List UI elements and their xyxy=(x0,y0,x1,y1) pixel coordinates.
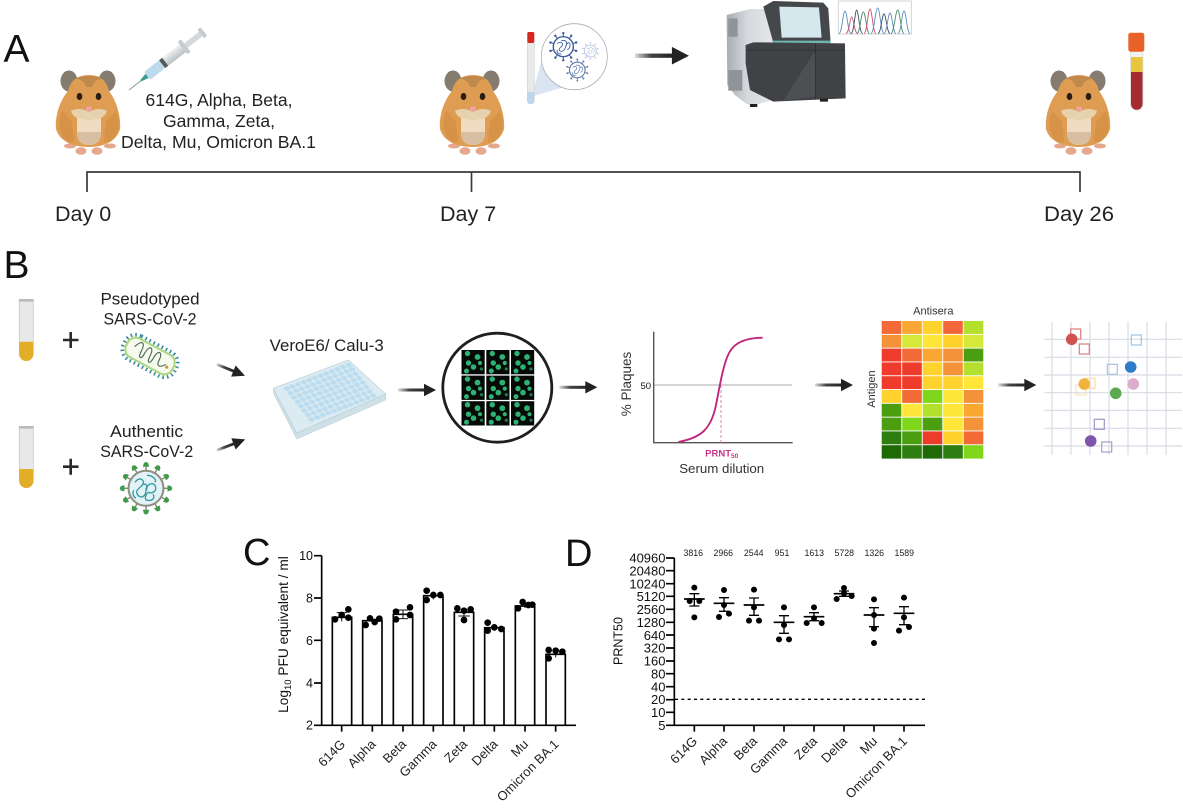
arrow: pseudotyped to plate xyxy=(214,359,247,381)
x-axis labels: Delta xyxy=(818,733,851,766)
panel: D PRNT50 titres xyxy=(565,533,925,801)
label: pseudotyped: SARS-CoV-2 xyxy=(104,310,196,328)
icon: microscopy well xyxy=(443,333,552,442)
icon: syringe xyxy=(124,25,209,96)
label: authentic: Authentic xyxy=(110,423,183,441)
icon: blood tube xyxy=(1128,33,1144,110)
y-axis title: PRNT50 xyxy=(612,617,626,665)
x-axis labels: Mu xyxy=(508,737,531,760)
x-axis labels: Gamma xyxy=(396,736,440,780)
panel: C virus titres xyxy=(243,532,576,804)
geometric mean titres: 1326 xyxy=(865,548,884,558)
x-axis labels: Delta xyxy=(469,736,501,769)
text: variants inoculated: 614G, Alpha, Beta, xyxy=(146,90,292,110)
arrow: authentic to plate xyxy=(215,434,247,456)
x-axis labels: 614G xyxy=(667,734,700,767)
x-axis labels: Alpha xyxy=(345,736,379,771)
y-axis title: PFU equivalent / ml xyxy=(276,556,291,679)
geometric mean titres: 1613 xyxy=(805,548,824,558)
y-axis labels: 5120 xyxy=(637,589,666,604)
geometric mean titres: 2544 xyxy=(744,548,764,558)
y-axis labels: 160 xyxy=(644,654,666,669)
bar chart xyxy=(314,556,576,732)
timeline axis xyxy=(87,172,1080,192)
panel: A timeline xyxy=(4,1,1144,226)
y-axis labels xyxy=(629,551,666,733)
geometric mean titres xyxy=(684,548,914,558)
x-axis labels: Beta xyxy=(380,736,410,766)
x-axis labels: Alpha xyxy=(696,733,731,768)
icon: plus 1 xyxy=(63,332,78,348)
chart: neutralisation curve xyxy=(619,332,793,476)
y-axis labels xyxy=(299,549,313,733)
y-axis labels: 2 xyxy=(306,719,313,733)
geometric mean titres: 1589 xyxy=(895,548,914,558)
y-axis labels: 1280 xyxy=(637,615,666,630)
arrow: plate to imaging xyxy=(398,384,436,396)
x-axis labels xyxy=(667,733,910,801)
y-axis labels: 4 xyxy=(306,676,313,690)
hamster: day 26 xyxy=(1046,70,1110,155)
dot plot xyxy=(666,558,925,732)
y-axis labels: 20480 xyxy=(629,564,666,578)
label: Day 0: Day 0 xyxy=(55,202,111,226)
chart: neutralisation curve: 50 xyxy=(731,453,739,460)
label: Day 26: Day 26 xyxy=(1044,202,1114,226)
x-axis labels: Zeta xyxy=(791,733,821,763)
arrow: curve to heatmap xyxy=(815,379,853,391)
y-axis title: 10 xyxy=(283,679,294,690)
text: variants inoculated: Delta, Mu, Omicron BA.1 xyxy=(121,132,316,152)
y-axis labels: 20 xyxy=(651,692,666,707)
y-axis labels: 8 xyxy=(306,592,313,606)
label: pseudotyped: Pseudotyped xyxy=(100,290,200,308)
arrow: heatmap to map xyxy=(998,379,1036,391)
icon: sequencing machine xyxy=(727,1,846,107)
label: authentic xyxy=(100,423,193,461)
geometric mean titres: 3816 xyxy=(684,548,703,558)
chart: sequencing chromatogram xyxy=(838,1,911,34)
text: variants inoculated: Gamma, Zeta, xyxy=(163,111,275,131)
chart: antigen antisera heatmap xyxy=(866,305,983,459)
panel: B assay workflow xyxy=(4,244,1182,515)
heading: D: D xyxy=(565,533,592,575)
geometric mean titres: 5728 xyxy=(835,548,854,558)
icon: plus 2 xyxy=(63,459,78,475)
icon: authentic virus xyxy=(120,462,172,515)
x-axis labels: Mu xyxy=(857,734,880,757)
heading: A: A xyxy=(4,28,30,71)
x-axis labels: Omicron BA.1 xyxy=(842,734,910,801)
x-axis labels xyxy=(315,736,562,804)
chart: neutralisation curve: PRNT xyxy=(705,449,731,460)
label: cell lines: VeroE6/ Calu-3 xyxy=(270,337,384,355)
arrow: to sequencer xyxy=(635,47,689,65)
hamster: day 7 xyxy=(440,70,504,155)
heading: B: B xyxy=(4,244,30,287)
chart: neutralisation curve: Serum dilution xyxy=(679,461,764,476)
icon: serum tube 2 xyxy=(19,426,34,488)
y-axis title: Log xyxy=(276,690,291,713)
icon: pseudotyped virus xyxy=(118,330,182,382)
x-axis labels: Gamma xyxy=(747,733,791,777)
y-axis labels: 10240 xyxy=(629,576,666,591)
text: variants inoculated xyxy=(121,90,316,152)
y-axis labels: 10 xyxy=(651,705,666,720)
y-axis labels: 10 xyxy=(299,549,313,563)
hamster: day 0 xyxy=(56,70,120,155)
geometric mean titres: 951 xyxy=(775,548,789,558)
x-axis labels: 614G xyxy=(315,737,348,770)
chart: neutralisation curve: % Plaques xyxy=(619,351,634,416)
x-axis labels: Zeta xyxy=(441,736,471,766)
chart: antigen antisera heatmap: Antisera xyxy=(913,305,954,317)
x-axis labels: Omicron BA.1 xyxy=(494,737,562,804)
y-axis labels: 320 xyxy=(644,641,666,656)
label: authentic: SARS-CoV-2 xyxy=(100,443,193,461)
y-axis labels: 640 xyxy=(644,628,666,643)
chart: neutralisation curve: 50 xyxy=(640,381,651,392)
y-axis labels: 40 xyxy=(651,679,666,694)
y-axis labels: 5 xyxy=(658,718,666,733)
chart: antigen antisera heatmap: Antigen xyxy=(866,370,878,408)
y-axis labels: 6 xyxy=(306,634,313,648)
icon: swab tube with magnified virus xyxy=(527,24,607,104)
y-axis labels: 40960 xyxy=(629,551,666,566)
icon: serum tube 1 xyxy=(19,299,34,361)
arrow: imaging to curve xyxy=(559,381,597,394)
label: Day 7: Day 7 xyxy=(440,202,496,226)
icon: 96-well plate xyxy=(273,360,386,439)
heading: C: C xyxy=(243,532,270,574)
geometric mean titres: 2966 xyxy=(714,548,733,558)
x-axis labels: Beta xyxy=(731,733,761,763)
label: pseudotyped xyxy=(100,290,200,328)
y-axis labels: 80 xyxy=(651,666,666,681)
y-axis labels: 2560 xyxy=(637,602,666,617)
chart: antigenic map xyxy=(1044,322,1182,455)
